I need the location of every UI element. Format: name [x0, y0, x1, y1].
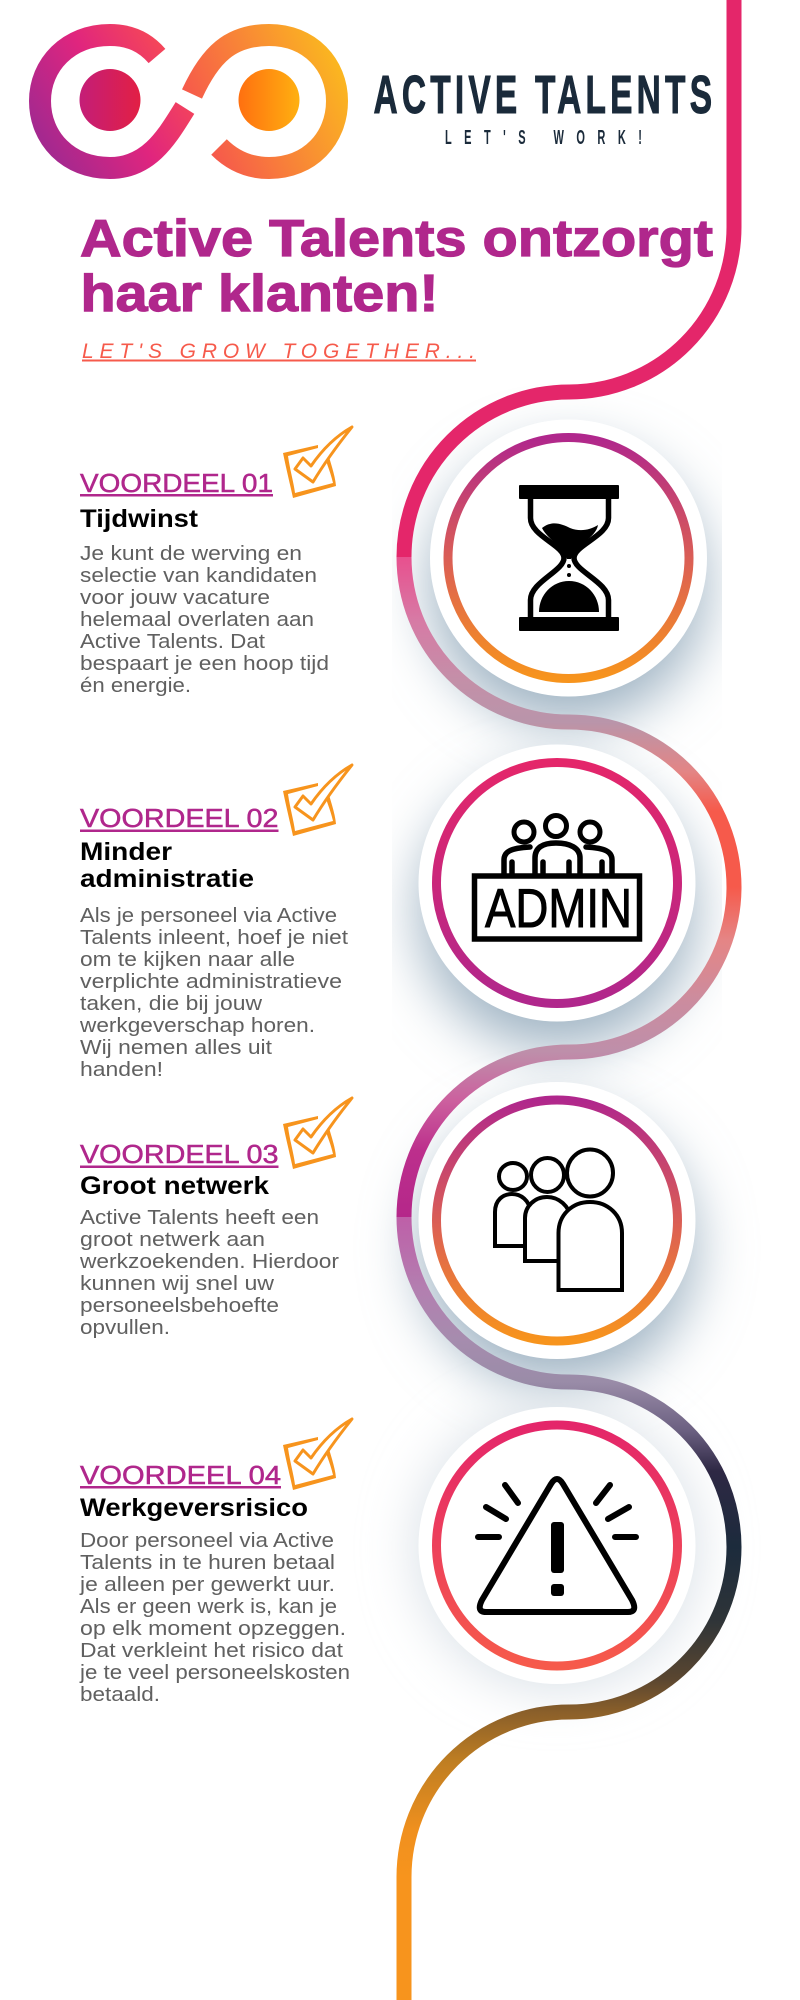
subheading — [80, 838, 254, 893]
body text: kunnen wij snel uw — [80, 1273, 275, 1295]
body text: betaald. — [80, 1684, 160, 1706]
body text: Door personeel via Active — [80, 1530, 334, 1552]
heading: VOORDEEL 01 — [80, 468, 273, 498]
title — [80, 210, 713, 323]
body text: personeelsbehoefte — [80, 1295, 279, 1317]
body text: handen! — [80, 1059, 163, 1081]
title: haar klanten! — [80, 265, 438, 323]
icon: group of people — [495, 1150, 622, 1290]
body text: én energie. — [80, 675, 191, 697]
body text: werkgeverschap horen. — [79, 1015, 315, 1037]
body text: om te kijken naar alle — [80, 949, 295, 971]
panel: voordeel 02 — [79, 765, 352, 1081]
body text: bespaart je een hoop tijd — [80, 653, 329, 675]
body text: Als je personeel via Active — [80, 905, 337, 927]
circle 2: admin — [418, 744, 696, 1022]
circle 4: warning — [418, 1407, 696, 1684]
winding gradient track — [404, 0, 734, 2000]
logo: infinity symbol — [40, 35, 337, 168]
body text: opvullen. — [80, 1317, 170, 1339]
body text — [80, 543, 329, 697]
body text: helemaal overlaten aan — [80, 609, 314, 631]
body text — [79, 1207, 339, 1339]
circle shadows — [419, 448, 706, 1049]
body text: voor jouw vacature — [80, 587, 270, 609]
body text: Dat verkleint het risico dat — [80, 1640, 343, 1662]
body text — [79, 905, 348, 1081]
subheading: Groot netwerk — [80, 1172, 269, 1200]
circle 3: group — [418, 1082, 696, 1359]
body text: Talents in te huren betaal — [80, 1552, 335, 1574]
panel: voordeel 03 — [79, 1098, 352, 1339]
checkbox icon — [283, 765, 352, 836]
title: Active Talents ontzorgt — [80, 210, 713, 268]
subheading: Tijdwinst — [80, 505, 199, 533]
body text: Talents inleent, hoef je niet — [80, 927, 348, 949]
body text: je alleen per gewerkt uur. — [79, 1574, 335, 1596]
icon: hourglass — [519, 485, 619, 631]
heading: VOORDEEL 03 — [80, 1139, 278, 1169]
body text: Active Talents. Dat — [80, 631, 265, 653]
checkbox icon — [283, 1098, 352, 1169]
heading: VOORDEEL 02 — [80, 803, 278, 833]
subheading: Werkgeversrisico — [80, 1494, 308, 1522]
body text: werkzoekenden. Hierdoor — [79, 1251, 339, 1273]
icon: warning triangle — [478, 1479, 636, 1612]
body text: groot netwerk aan — [80, 1229, 265, 1251]
soft shadows lower circles — [419, 1110, 695, 1686]
body text: Je kunt de werving en — [80, 543, 302, 565]
subheading: Minder — [80, 838, 172, 866]
subheading: administratie — [80, 865, 254, 893]
icon: admin desk with people: ADMIN — [485, 877, 632, 939]
body text: Active Talents heeft een — [80, 1207, 319, 1229]
icon: admin desk with people — [474, 816, 640, 939]
body text: verplichte administratieve — [80, 971, 342, 993]
panel: voordeel 04 — [79, 1419, 352, 1706]
logo wordmark: LET'S WORK! — [445, 127, 642, 149]
heading: VOORDEEL 04 — [80, 1460, 281, 1490]
checkbox icon — [283, 427, 352, 498]
body text: taken, die bij jouw — [80, 993, 263, 1015]
circle 1: hourglass — [430, 420, 707, 696]
body text: selectie van kandidaten — [80, 565, 317, 587]
body text: op elk moment opzeggen. — [80, 1618, 346, 1640]
body text: je te veel personeelskosten — [79, 1662, 350, 1684]
body text: Wij nemen alles uit — [80, 1037, 273, 1059]
checkbox icon — [283, 1419, 352, 1490]
subtitle: LET'S GROW TOGETHER... — [82, 340, 475, 363]
body text: Als er geen werk is, kan je — [80, 1596, 337, 1618]
body text — [79, 1530, 350, 1706]
logo wordmark: ACTIVE TALENTS — [374, 64, 712, 125]
panel: voordeel 01 — [80, 427, 352, 697]
